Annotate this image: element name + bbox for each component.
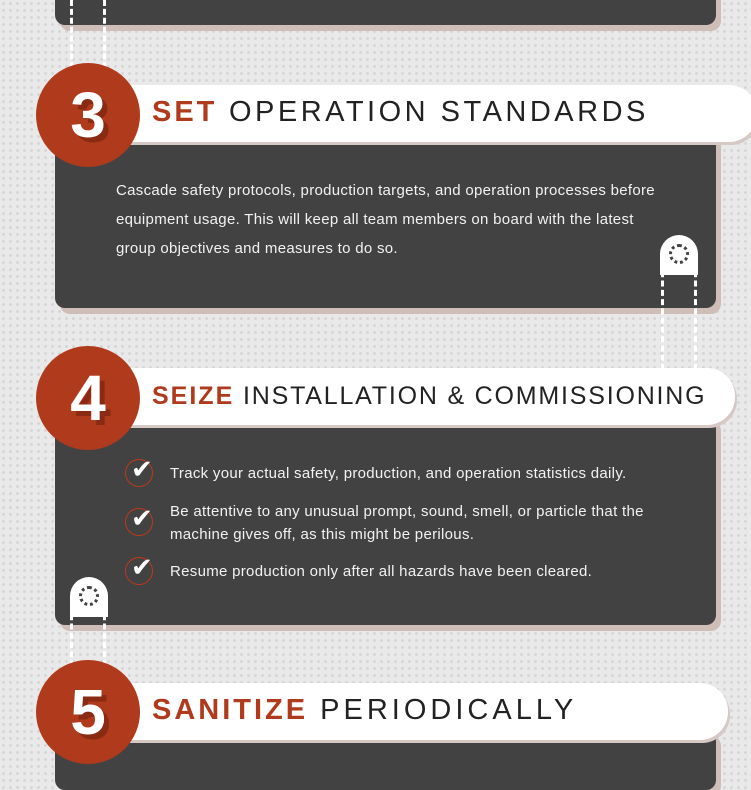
text: item 2: machine gives off, as this might be perilous.: [170, 526, 474, 543]
text: item 2: Be attentive to any unusual prompt, sound, smell, or particle that the: [170, 503, 644, 520]
pill: step 3 heading: [118, 85, 751, 142]
pill: step 4 heading: SEIZE INSTALLATION & COMMISSIONING: [152, 382, 706, 410]
checklist item 1: [125, 459, 153, 487]
text: item 2: [170, 503, 644, 543]
circle: number 4: 4: [70, 362, 106, 434]
icon: gear left: [70, 577, 108, 617]
pill: step 4 heading: [118, 368, 735, 425]
checklist item 3: [125, 557, 153, 585]
circle: number 5: [36, 660, 140, 764]
pill: step 5 heading: [118, 683, 728, 740]
circle: number 3: [36, 63, 140, 167]
checklist item 2: [125, 508, 153, 536]
text: step 3 body: group objectives and measures to do so.: [116, 240, 398, 257]
belt: top left: [70, 0, 106, 95]
pill: step 5 heading: SANITIZE PERIODICALLY: [152, 694, 577, 726]
pill: step 3 heading: SET OPERATION STANDARDS: [152, 96, 649, 128]
text: step 3 body: [116, 182, 655, 257]
panel: step 4: [55, 415, 716, 625]
panel: step 5: [55, 730, 716, 790]
panel: step 3: [55, 130, 716, 308]
belt: left lower: [70, 605, 106, 685]
circle: number 5: 5: [70, 676, 106, 748]
belt: right with gear: [661, 262, 697, 370]
circle: number 4: [36, 346, 140, 450]
panel: step 2 bottom: [55, 0, 716, 25]
text: item 3: Resume production only after all hazards have been cleared.: [170, 563, 592, 580]
text: item 1: Track your actual safety, production, and operation statistics daily.: [170, 465, 626, 482]
text: step 3 body: Cascade safety protocols, production targets, and operation processes before: [116, 182, 655, 199]
text: step 3 body: equipment usage. This will keep all team members on board with the latest: [116, 211, 634, 228]
icon: gear right: [660, 235, 698, 275]
circle: number 3: 3: [70, 79, 106, 151]
